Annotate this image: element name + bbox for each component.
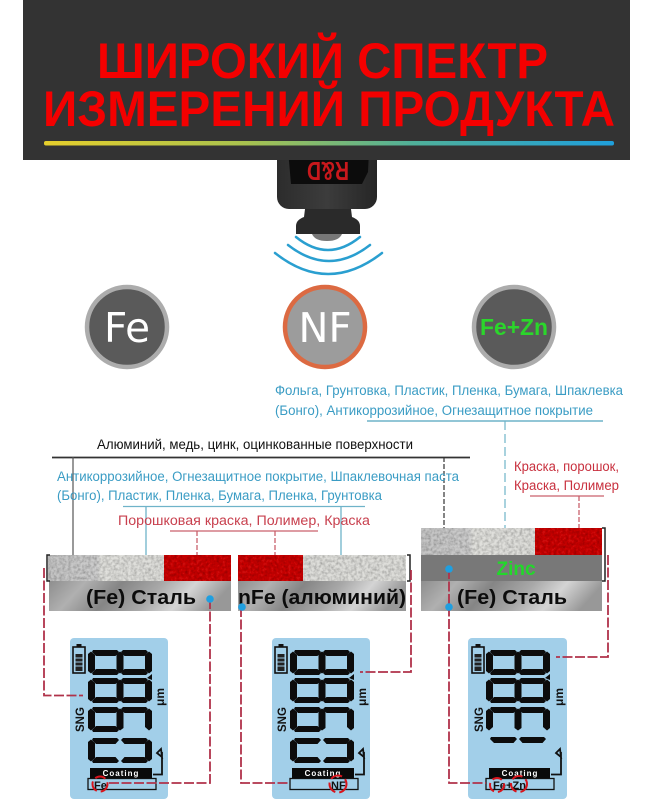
mode icon: Fe+Zn: [474, 287, 554, 367]
right red leader: [530, 496, 604, 528]
sample block: Zinc on steel: Zinc: [496, 559, 536, 580]
mode box: [290, 778, 358, 790]
right column coatings text: (Бонго), Антикоррозийное, Огнезащитное покрытие: [275, 403, 593, 418]
title line 2: ИЗМЕРЕНИЙ ПРОДУКТА: [43, 80, 615, 137]
mode icon: Fe+Zn: Fe+Zn: [480, 314, 548, 340]
mode arrow: [153, 749, 162, 774]
mode highlight: [92, 776, 108, 792]
right column coatings text: Фольга, Грунтовка, Пластик, Пленка, Бумага, Шпаклевка: [275, 383, 623, 398]
digit readout: [290, 650, 354, 763]
LCD panel: NF mode: NF: [331, 780, 346, 792]
LCD panel: Fe+Zn mode: Fe+Zn: [493, 780, 526, 792]
SNG label: SNG: [277, 707, 289, 732]
battery icon: [472, 644, 484, 673]
mode icon: NF: [285, 287, 365, 367]
unit label: μm: [153, 688, 167, 706]
LCD panel: NF mode: [272, 638, 370, 799]
LCD panel: Fe+Zn mode: [468, 638, 567, 799]
LCD panel: NF mode: Coating: [305, 769, 341, 778]
powder coating text: Порошковая краска, Полимер, Краска: [118, 513, 371, 528]
mode box: [88, 778, 156, 790]
mode icon: NF: NF: [298, 304, 352, 352]
mode icon: Fe: [87, 287, 167, 367]
LCD panel: Fe mode: [70, 638, 168, 799]
device probe: [277, 140, 377, 241]
mode icon: Fe: Fe: [104, 304, 150, 352]
powder coating leaders: [170, 531, 318, 555]
digit readout: [486, 650, 550, 743]
left coatings text: (Бонго), Пластик, Пленка, Бумага, Пленка, Грунтовка: [57, 488, 382, 503]
sample block: nFe aluminium: nFe (алюминий): [238, 587, 406, 609]
mode arrow: [355, 749, 364, 774]
SNG label: SNG: [75, 707, 87, 732]
battery icon: [275, 644, 287, 673]
right red text: [514, 459, 619, 493]
left coatings text: Антикоррозийное, Огнезащитное покрытие, Шпаклевочная паста: [57, 469, 459, 484]
red connector lines: [44, 555, 608, 783]
substrate heading: Алюминий, медь, цинк, оцинкованные поверхности: [97, 437, 413, 452]
R&D logo: R&D: [307, 156, 349, 186]
LCD panel: Fe+Zn mode: Coating: [502, 769, 538, 778]
mode highlight: [490, 776, 527, 792]
LCD panel: Fe mode: Coating: [103, 769, 139, 778]
probe neck: [296, 209, 360, 234]
unit label: μm: [355, 688, 369, 706]
mode arrow: [551, 749, 561, 774]
header banner: [23, 0, 630, 160]
sample block: nFe aluminium: [238, 555, 410, 611]
right column coatings text: [275, 383, 623, 418]
coating bar: [292, 768, 354, 778]
sample block: Fe steel: (Fe) Сталь: [86, 587, 196, 609]
substrate bracket: [52, 457, 470, 555]
mode highlight: [330, 776, 346, 792]
digit readout: [88, 650, 152, 763]
sample block: Zinc on steel: (Fe) Сталь: [457, 587, 567, 609]
right blue leader: [367, 421, 603, 528]
device screen: [288, 150, 369, 184]
battery icon: [73, 644, 85, 673]
unit label: μm: [552, 688, 566, 706]
title line 1: ШИРОКИЙ СПЕКТР: [97, 32, 548, 89]
mode box: [486, 778, 554, 790]
LCD panel: Fe mode: Fe: [94, 780, 107, 792]
gradient rule: [44, 141, 614, 146]
SNG label: SNG: [474, 707, 486, 732]
device body: [277, 140, 377, 209]
signal waves: [275, 237, 382, 274]
left blue leaders: [123, 506, 365, 555]
coating bar: [489, 768, 550, 778]
coating bar: [90, 768, 152, 778]
blue connector dots: [206, 565, 453, 611]
right red text: Краска, Полимер: [514, 478, 619, 493]
sample block: Zinc on steel: [421, 528, 605, 611]
sample block: Fe steel: [47, 555, 231, 611]
right red text: Краска, порошок,: [514, 459, 619, 474]
probe tip: [312, 234, 342, 241]
left coatings text: [57, 469, 459, 503]
